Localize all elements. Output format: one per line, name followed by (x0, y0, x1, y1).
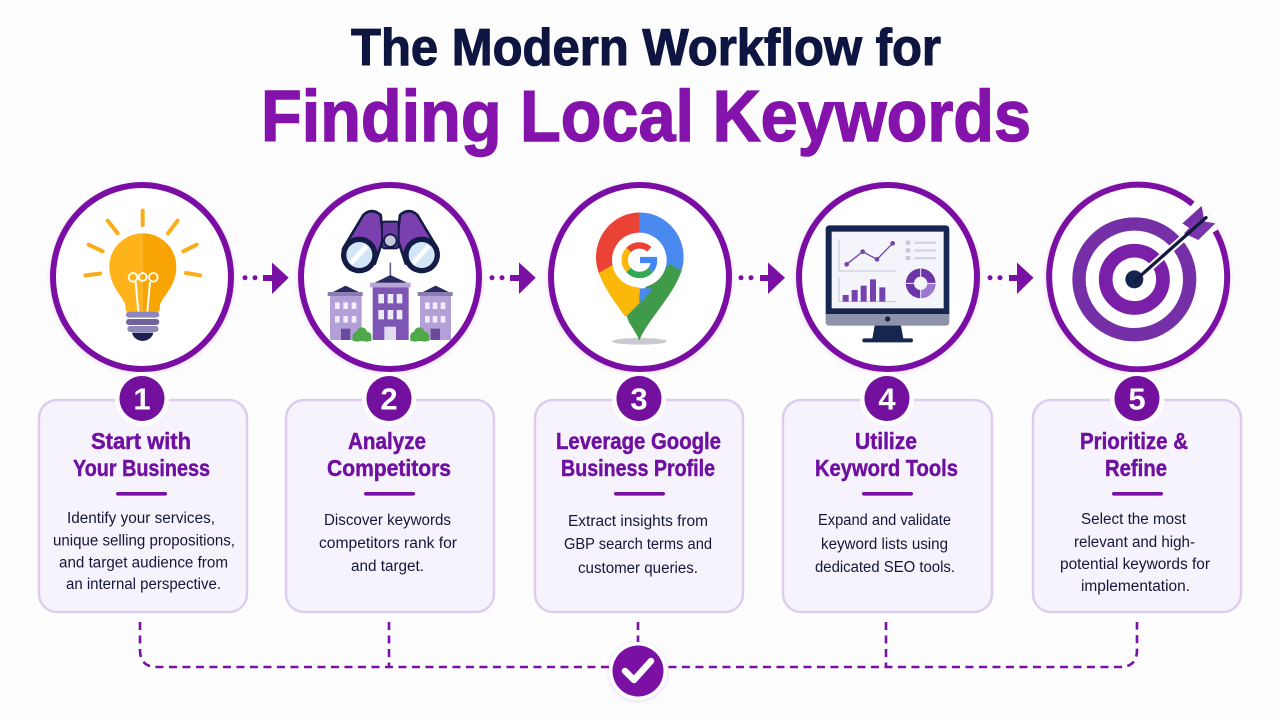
bottom dashed connector (140, 622, 1137, 667)
panel: step 2: 2 (380, 382, 398, 416)
panel: step 5: 5 (1128, 382, 1146, 416)
panel: step 5: Select the most (1081, 511, 1187, 528)
panel: step 2: competitors rank for (319, 535, 457, 552)
arrow 1 to 2 (242, 262, 289, 294)
arrow 3 to 4 (738, 262, 785, 294)
check badge (609, 642, 667, 700)
panel: step 4 (783, 372, 992, 612)
step 1 circle with lightbulb (53, 185, 231, 369)
step 2 circle with binoculars and buildings (301, 185, 479, 369)
panel: step 5: Refine (1105, 455, 1167, 481)
panel: step 5: potential keywords for (1060, 556, 1210, 573)
panel: step 3: GBP search terms and (564, 536, 712, 553)
panel: step 5: implementation. (1081, 578, 1190, 595)
panel: step 1: 1 (133, 382, 151, 416)
panel: step 1: unique selling propositions, (53, 532, 235, 550)
step 5 circle with target and arrow (1046, 182, 1230, 372)
panel: step 3: Business Profile (561, 455, 715, 481)
panel: step 3: Leverage Google (556, 428, 721, 454)
arrow 4 to 5 (988, 262, 1034, 294)
panel: step 5 (1033, 372, 1241, 612)
panel: step 4: 4 (878, 382, 896, 416)
panel: step 1: an internal perspective. (66, 576, 221, 593)
panel: step 2: Competitors (327, 455, 451, 481)
panel: step 5: Prioritize & (1080, 428, 1188, 454)
panel: step 4: dedicated SEO tools. (815, 559, 955, 576)
panel: step 4: Keyword Tools (815, 455, 958, 481)
panel: step 3 (535, 372, 743, 612)
panel: step 4: Expand and validate (818, 512, 951, 529)
panel: step 3: 3 (630, 382, 648, 416)
panel: step 4: keyword lists using (821, 536, 948, 553)
title (261, 19, 1031, 157)
panel: step 2: Analyze (348, 428, 426, 454)
panel: step 2: Discover keywords (324, 512, 451, 529)
panel: step 3: Extract insights from (568, 513, 708, 530)
panel: step 1: Identify your services, (67, 510, 215, 527)
panel: step 3: customer queries. (578, 560, 698, 577)
panel: step 2: and target. (351, 558, 424, 575)
panel: step 4: Utilize (855, 428, 917, 454)
panel: step 1: and target audience from (59, 554, 228, 572)
panel: step 1 (39, 372, 247, 612)
panel: step 2 (286, 372, 494, 612)
panel: step 1: Your Business (73, 455, 210, 481)
panel: step 5: relevant and high- (1074, 534, 1195, 551)
panel: step 1: Start with (91, 428, 191, 454)
arrow 2 to 3 (490, 262, 536, 294)
title: Finding Local Keywords (261, 77, 1031, 157)
step 4 circle with analytics monitor (799, 185, 977, 369)
step 3 circle with Google map pin (551, 185, 729, 369)
title: The Modern Workflow for (351, 19, 941, 77)
